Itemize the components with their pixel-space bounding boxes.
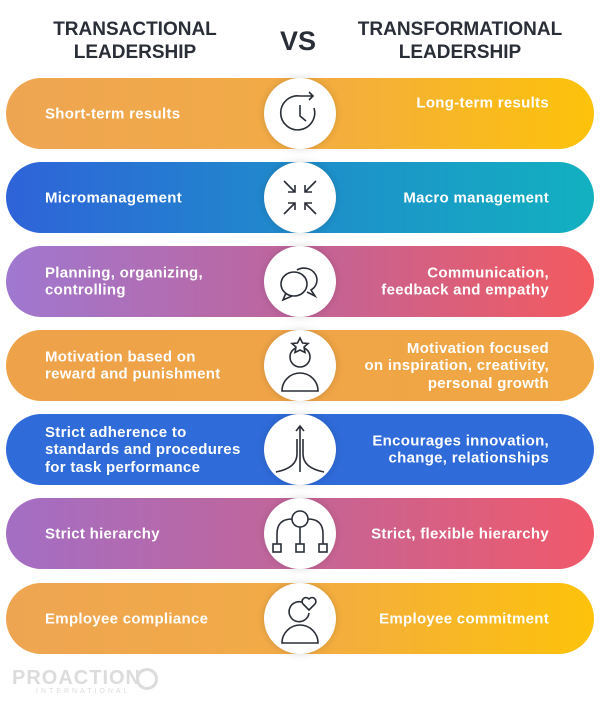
row 3: controlling	[45, 282, 126, 298]
title: transactional: TRANSACTIONAL	[53, 19, 217, 40]
icon: arrows	[264, 162, 336, 233]
row 3: Planning, organizing,	[45, 264, 203, 281]
logo: INTERNATIONAL	[36, 688, 130, 695]
icon: person star	[264, 330, 336, 401]
row 4	[6, 330, 594, 401]
title: transformational	[358, 19, 562, 63]
row 3: Communication,	[427, 264, 549, 281]
icon: hierarchy	[264, 498, 336, 569]
row 1	[6, 78, 594, 149]
row 3: feedback and empathy	[381, 282, 549, 298]
row 4: reward and punishment	[45, 366, 220, 382]
row 4: personal growth	[428, 374, 549, 391]
icon: speech bubbles	[264, 246, 336, 317]
row 5: for task performance	[45, 458, 200, 475]
title: transactional	[53, 19, 217, 63]
logo	[12, 667, 158, 695]
row 5: Strict adherence to	[45, 423, 187, 440]
row 1: Long-term results	[416, 94, 549, 111]
title: transformational: TRANSFORMATIONAL	[358, 19, 562, 40]
row 6	[6, 498, 594, 569]
row 4: on inspiration, creativity,	[364, 357, 549, 374]
title: transactional: LEADERSHIP	[74, 42, 196, 63]
row 4: Motivation focused	[407, 339, 549, 356]
row 2	[6, 162, 594, 233]
row 7	[6, 583, 594, 654]
row 2: Micromanagement	[45, 189, 182, 206]
row 1: Short-term results	[45, 105, 180, 122]
row 5	[6, 414, 594, 485]
row 7: Employee commitment	[379, 610, 549, 627]
row 4: Motivation based on	[45, 348, 196, 365]
row 2: Macro management	[403, 189, 549, 206]
title: vs: VS	[280, 26, 316, 56]
row 3	[6, 246, 594, 317]
row 5: change, relationships	[388, 450, 549, 466]
icon: merging arrow	[264, 414, 336, 485]
title: transformational: LEADERSHIP	[399, 42, 521, 63]
row 5: Encourages innovation,	[372, 432, 549, 449]
icon: person heart	[264, 583, 336, 654]
row 7: Employee compliance	[45, 610, 208, 627]
row 6: Strict hierarchy	[45, 525, 160, 542]
logo: PROACTION	[12, 667, 141, 689]
row 5: standards and procedures	[45, 441, 241, 458]
row 6: Strict, flexible hierarchy	[371, 525, 549, 542]
icon: clock	[264, 78, 336, 149]
